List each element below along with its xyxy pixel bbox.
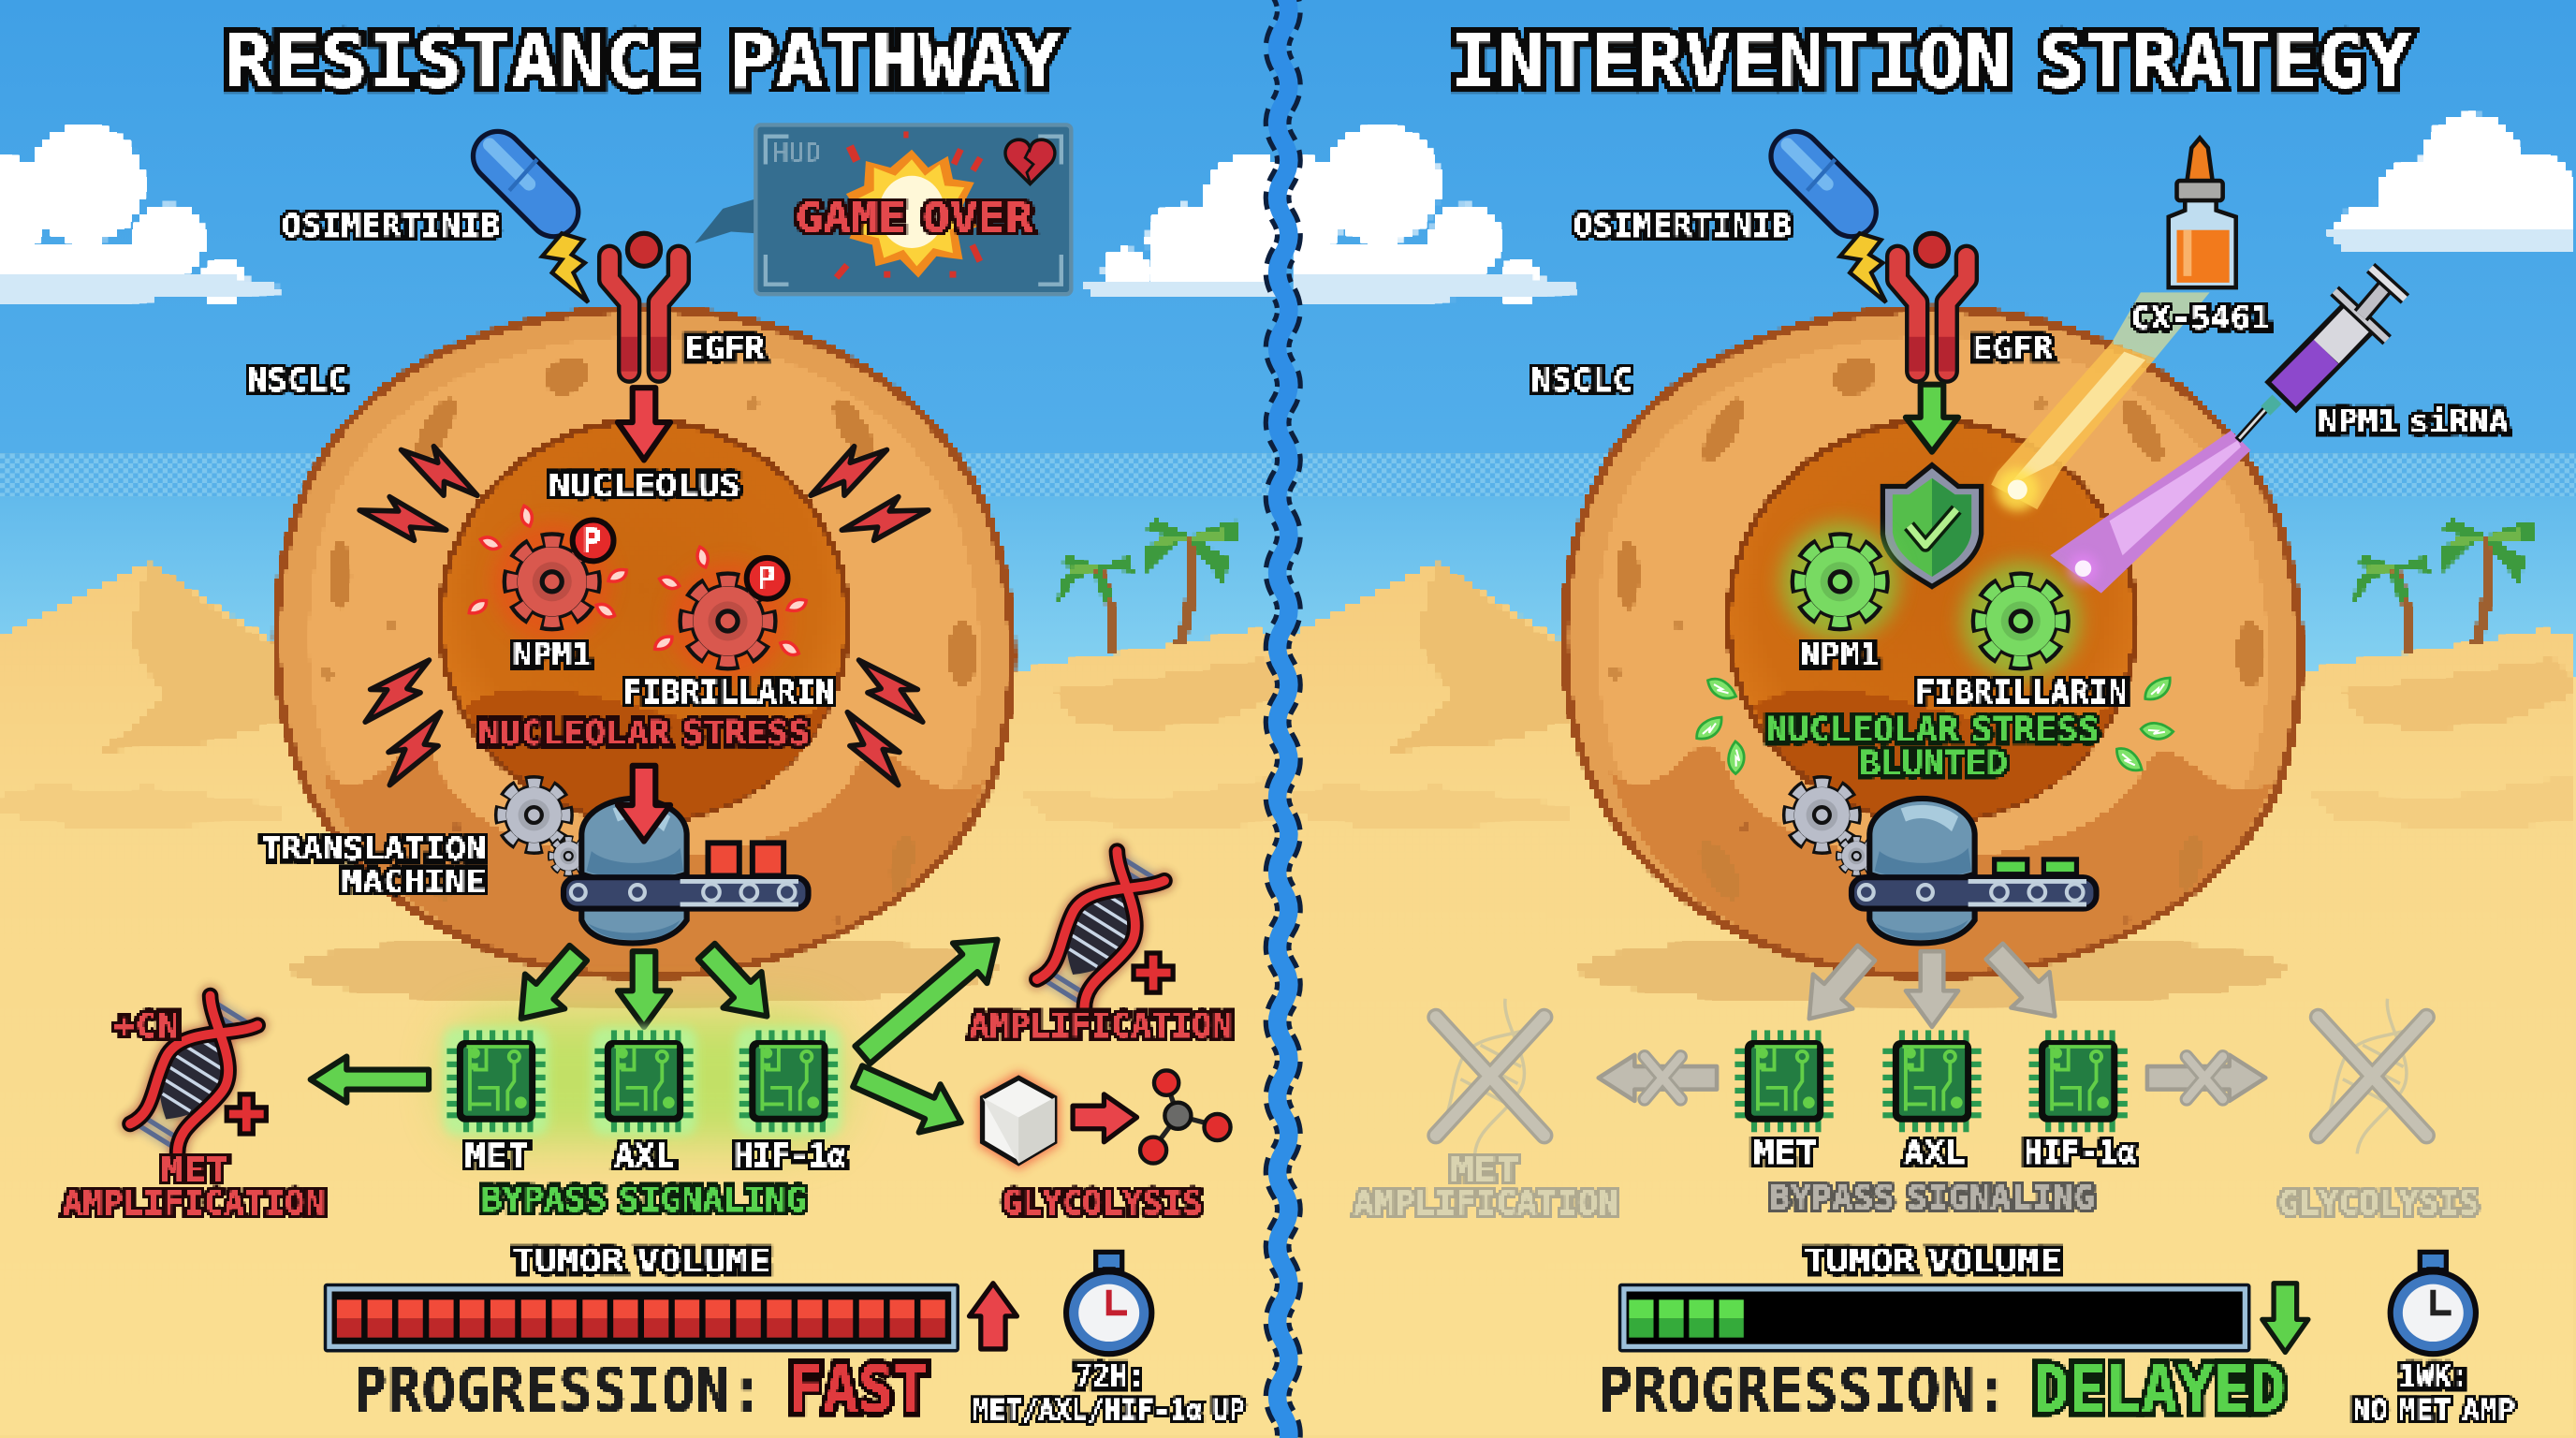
arrows: machine to kinases — [502, 933, 786, 1036]
title right: INTERVENTION STRATEGY — [1451, 19, 2412, 105]
label CX-5461: CX-5461 — [2130, 300, 2271, 337]
icon: stopwatch 1wk — [2391, 1252, 2476, 1354]
beam: NPM1 siRNA — [2050, 431, 2250, 594]
label NSCLC: NSCLC — [1531, 362, 1633, 400]
gear: fibrillarin restored — [1962, 562, 2080, 681]
label translation machine: TRANSLATION — [261, 830, 487, 868]
label fibrillarin: FIBRILLARIN — [1915, 674, 2128, 712]
right panel background — [1288, 0, 2576, 829]
icon: molecule — [1140, 1070, 1231, 1164]
label bypass signaling: BYPASS SIGNALING — [481, 1181, 807, 1220]
label no MET amp: NO MET AMP — [2352, 1394, 2515, 1427]
label NPM1: NPM1 — [513, 637, 592, 674]
icon: osimertinib capsule and lightning — [1788, 144, 1886, 302]
all text labels right — [1354, 19, 2515, 1428]
stress bolts right — [810, 432, 935, 785]
label MET faded: MET — [1451, 1152, 1519, 1190]
label NPM1: NPM1 — [1801, 637, 1880, 674]
arrow: stress to machine — [618, 766, 670, 842]
label glycolysis: GLYCOLYSIS — [1003, 1184, 1203, 1223]
left panel drawings — [125, 125, 1231, 1354]
label NPM1 siRNA: NPM1 siRNA — [2318, 404, 2509, 441]
translation machine right — [1788, 781, 2097, 943]
palm trees right panel — [2354, 520, 2537, 654]
beam: CX-5461 — [1991, 292, 2210, 511]
tumor volume bar delayed — [1618, 1284, 2250, 1352]
cell shadows — [291, 933, 2285, 1005]
label HIF-1a: HIF-1α — [2024, 1135, 2136, 1172]
clouds left panel — [0, 125, 1301, 305]
label AXL: AXL — [1904, 1135, 1965, 1172]
label nucleolus: NUCLEOLUS — [549, 467, 741, 505]
icon: stopwatch 72h — [1066, 1252, 1151, 1354]
stress bolts left — [353, 432, 478, 785]
icon: CX-5461 vial — [2169, 138, 2236, 287]
label bypass signaling muted: BYPASS SIGNALING — [1769, 1180, 2095, 1218]
bypass glow — [446, 1016, 842, 1144]
label EGFR: EGFR — [684, 330, 765, 367]
chip: HIF-1a — [736, 1027, 842, 1136]
label 72H: 72H: — [1075, 1357, 1145, 1395]
chip: AXL — [592, 1027, 696, 1136]
label MET: MET — [1753, 1135, 1817, 1172]
chip: HIF-1a right — [2029, 1030, 2128, 1132]
palm trees left panel — [1058, 520, 1240, 654]
divider: wavy pixel ribbon — [1278, 0, 1289, 1438]
label translation machine line 2: MACHINE — [342, 863, 487, 901]
label osimertinib: OSIMERTINIB — [282, 208, 500, 245]
label nucleolar stress: NUCLEOLAR STRESS — [1766, 712, 2100, 750]
right panel drawings — [1426, 138, 2476, 1354]
label MET amplification: MET — [161, 1152, 228, 1190]
left panel background — [0, 0, 1288, 829]
label tumor volume: TUMOR VOLUME — [513, 1242, 770, 1280]
gear: NPM1 phosphorylated — [467, 506, 628, 640]
clouds right panel — [1251, 113, 2576, 305]
game over text: GAME OVER — [795, 194, 1034, 242]
title left: RESISTANCE PATHWAY — [225, 19, 1061, 105]
label HIF-1a: HIF-1α — [735, 1137, 846, 1175]
label genes up: MET/AXL/HIF-1α UP — [973, 1394, 1245, 1427]
phospho P 2: P — [756, 560, 776, 598]
crossed out MET amplification — [1426, 994, 1555, 1158]
HUD label: HUD — [772, 139, 822, 168]
arrow: sugar to pyruvate — [1073, 1094, 1137, 1142]
dunes and sand left panel — [0, 560, 1288, 829]
phospho P: P — [582, 522, 602, 561]
chip: MET — [444, 1027, 549, 1136]
dunes and sand right panel — [1288, 560, 2573, 829]
gear: NPM1 restored — [1781, 522, 1899, 640]
progression value fast: FAST — [788, 1353, 929, 1428]
icon: sugar cube — [977, 1071, 1060, 1170]
arrow: EGFR to nucleolus green — [1906, 385, 1958, 452]
icon: EGFR receptor — [1897, 233, 1967, 372]
progression value delayed: DELAYED — [2033, 1353, 2286, 1428]
chip: AXL right — [1882, 1030, 1982, 1132]
icon: explosion — [846, 150, 977, 278]
chip: MET right — [1734, 1030, 1834, 1132]
arrow: volume down — [2262, 1284, 2308, 1352]
gear: fibrillarin phosphorylated — [652, 547, 807, 681]
calm green sparks right — [2115, 678, 2174, 776]
translation machine left — [500, 781, 809, 943]
tumor volume bar fast — [324, 1284, 959, 1352]
arrow: volume up — [970, 1284, 1017, 1349]
progression label: PROGRESSION: — [353, 1357, 764, 1427]
label amplification: AMPLIFICATION — [970, 1006, 1232, 1045]
label nucleolar stress: NUCLEOLAR STRESS — [478, 714, 810, 753]
label EGFR: EGFR — [1972, 330, 2053, 367]
explosion debris — [834, 131, 983, 280]
arrows: chips to outcomes — [311, 919, 1015, 1147]
label tumor volume: TUMOR VOLUME — [1804, 1242, 2062, 1280]
icon: NPM1 siRNA syringe — [2237, 268, 2405, 440]
label NSCLC: NSCLC — [247, 362, 347, 400]
arrows: blocked machine output — [1790, 933, 2074, 1036]
label glycolysis faded: GLYCOLYSIS — [2278, 1184, 2479, 1223]
product blocks red — [708, 843, 783, 875]
NSCLC tumour cell left — [276, 309, 1012, 976]
label osimertinib: OSIMERTINIB — [1573, 208, 1792, 245]
NSCLC tumour cell right — [1564, 309, 2300, 976]
arrow: EGFR to nucleolus — [618, 388, 670, 460]
label fibrillarin: FIBRILLARIN — [622, 674, 835, 712]
label blunted: BLUNTED — [1860, 745, 2008, 784]
progression label: PROGRESSION: — [1599, 1357, 2009, 1427]
label +CN: +CN — [113, 1006, 179, 1045]
icon: DNA amplification — [1032, 848, 1173, 1012]
label AXL: AXL — [614, 1137, 675, 1175]
icon: DNA MET amplification — [125, 993, 266, 1156]
calm green sparks left — [1694, 672, 1751, 774]
icon: EGFR receptor — [609, 233, 679, 372]
all text labels left — [63, 19, 1245, 1428]
product blocks green — [1995, 859, 2076, 874]
icon: broken heart — [1005, 139, 1055, 184]
label amplification faded: AMPLIFICATION — [1354, 1184, 1618, 1223]
label 1WK: 1WK: — [2398, 1357, 2469, 1395]
blocked arrow left — [1599, 1055, 1717, 1101]
label MET: MET — [465, 1137, 529, 1175]
icon: protective shield — [1882, 465, 1982, 587]
crossed out glycolysis — [2307, 994, 2437, 1158]
label MET amplification line 2: AMPLIFICATION — [63, 1184, 326, 1223]
icon: osimertinib capsule and lightning — [490, 144, 588, 302]
blocked arrow right — [2147, 1055, 2265, 1101]
HUD game over panel — [695, 125, 1071, 294]
